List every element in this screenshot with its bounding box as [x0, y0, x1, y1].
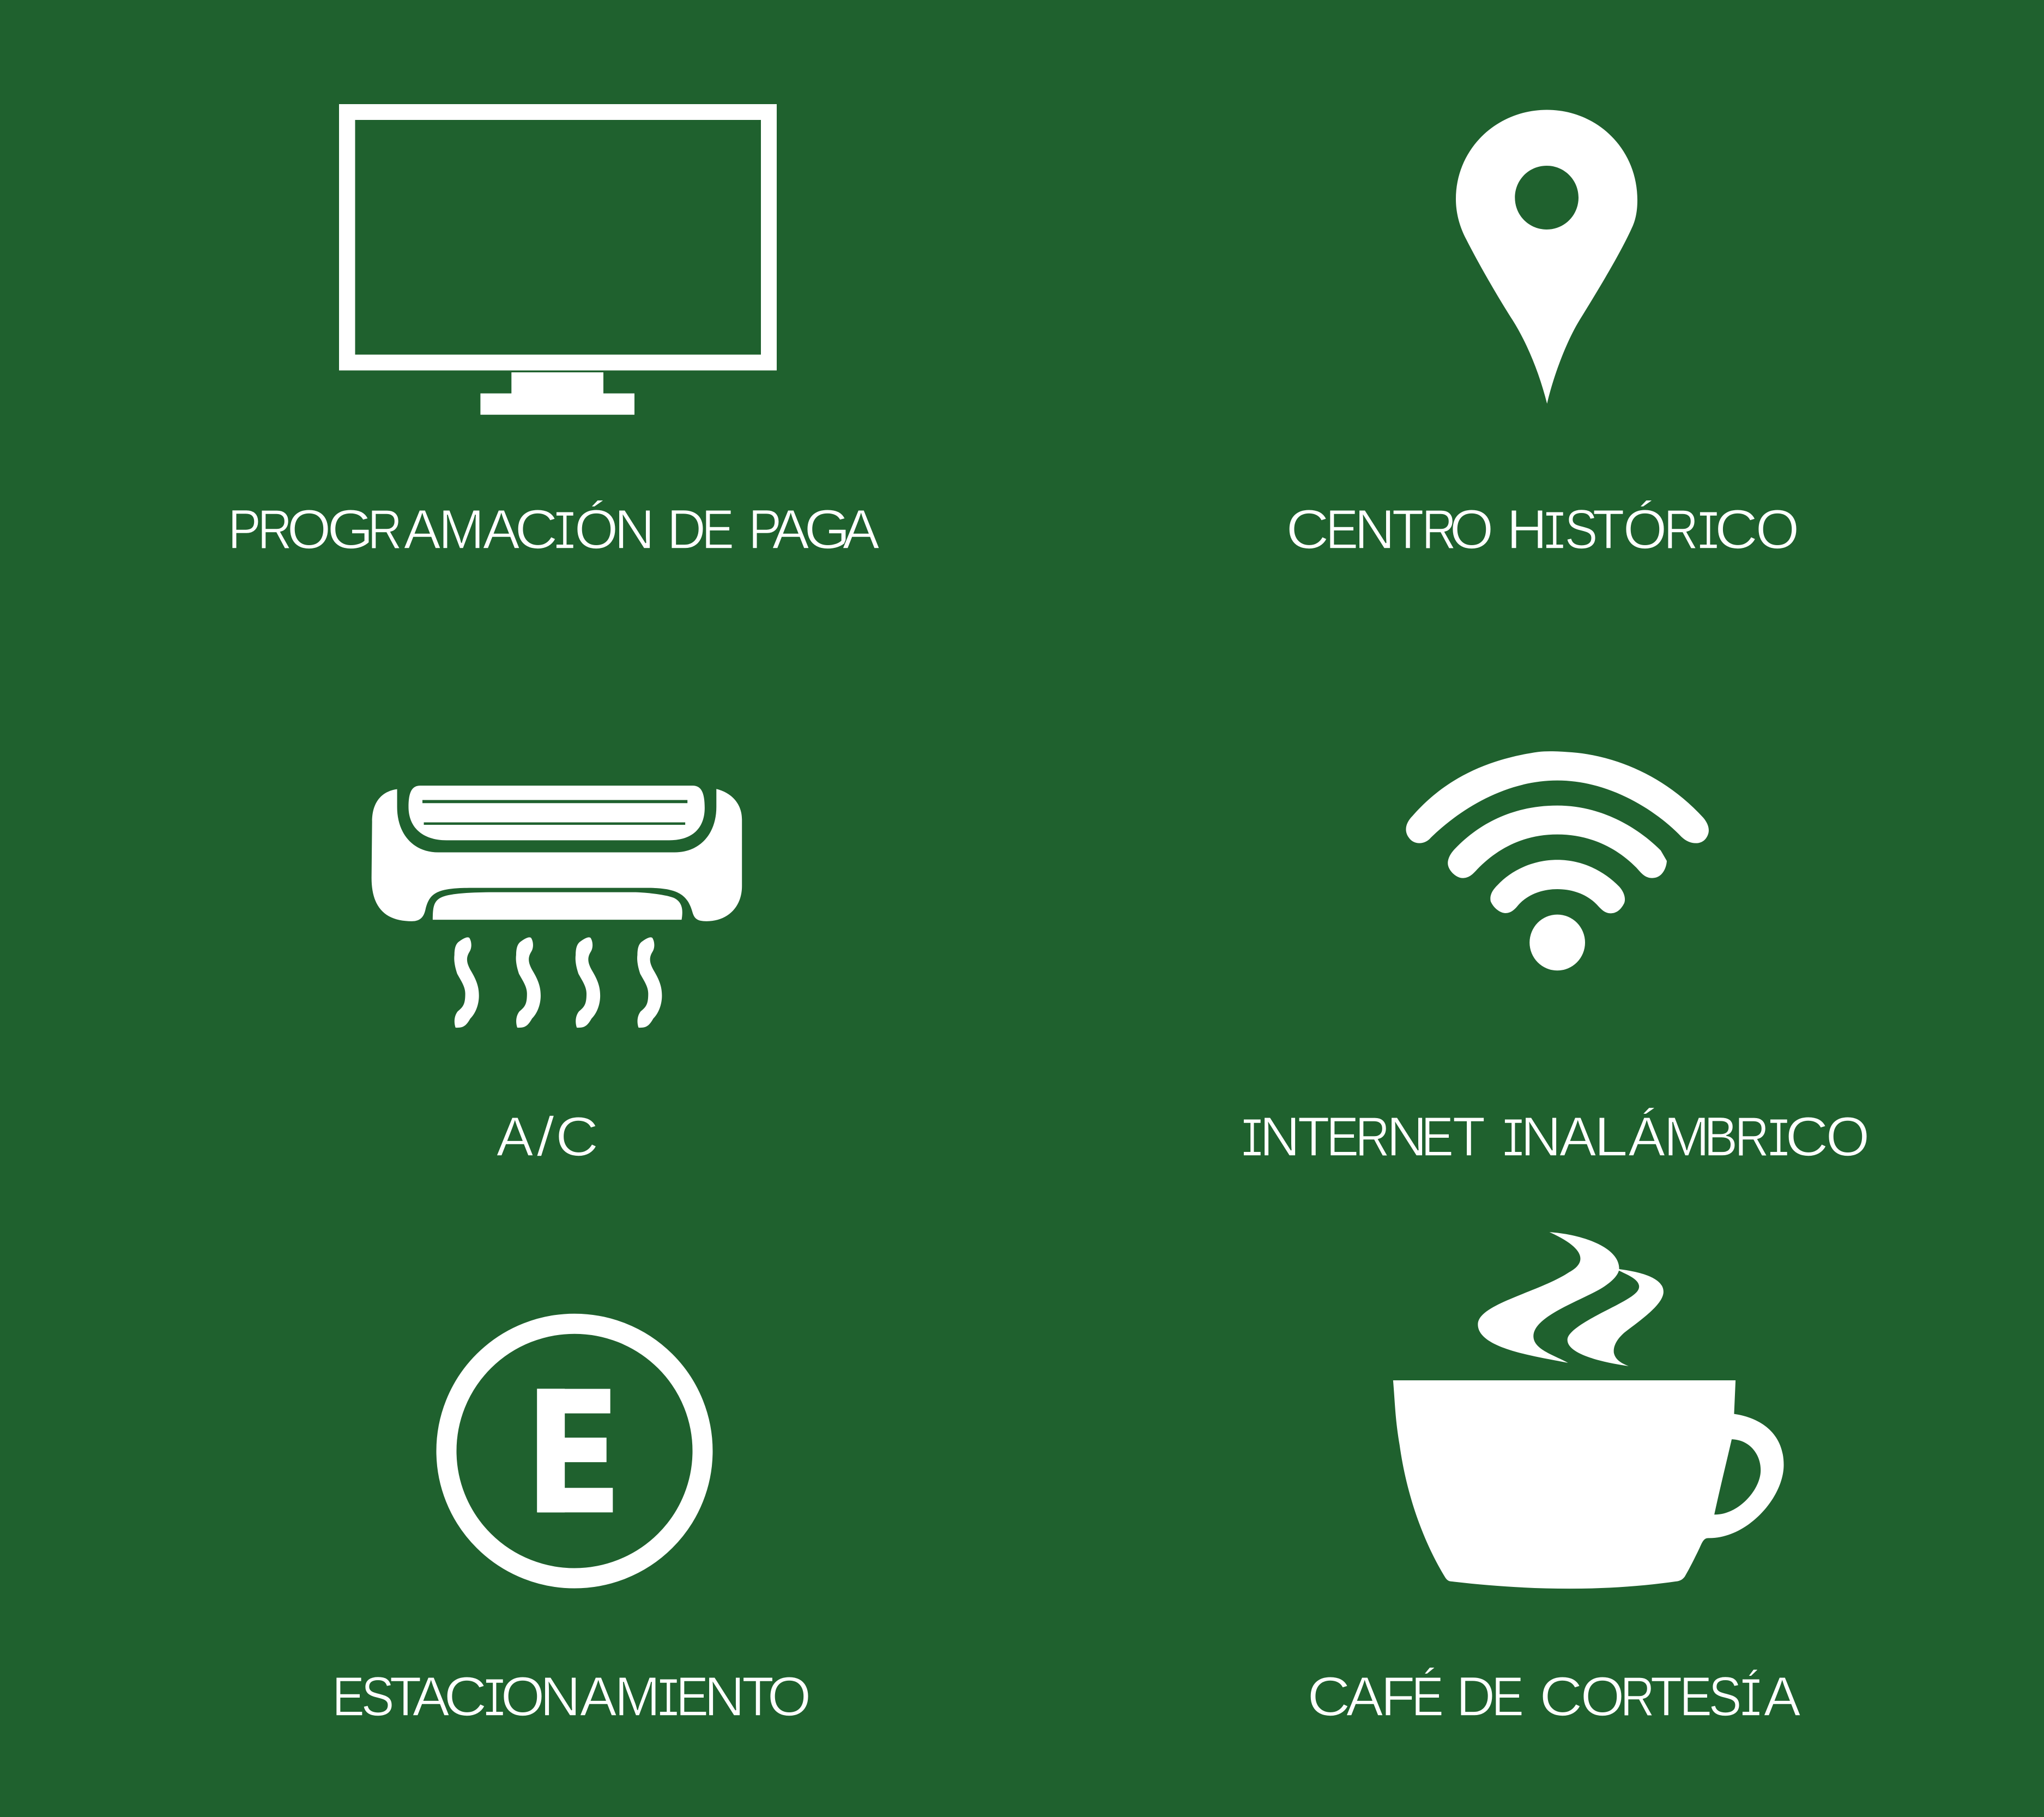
label: programación de paga: P	[228, 498, 261, 560]
label: café de cortesía: C	[1539, 1665, 1583, 1728]
label: internet inalámbrico: B	[1704, 1106, 1738, 1168]
label: estacionamiento: T	[390, 1665, 421, 1728]
label: estacionamiento: N	[704, 1665, 745, 1728]
label: estacionamiento: M	[615, 1665, 661, 1728]
label: estacionamiento: I	[655, 1669, 681, 1733]
label: café de cortesía: A	[1346, 1665, 1383, 1728]
label: programación de paga: A	[772, 498, 809, 560]
label: internet inalámbrico: T	[1453, 1106, 1484, 1168]
label: estacionamiento: T	[742, 1665, 774, 1728]
icon: parking circle	[446, 1324, 703, 1578]
icon: television	[339, 104, 777, 415]
label: estacionamiento: I	[481, 1669, 507, 1733]
label: centro histórico: O	[1450, 498, 1493, 560]
label: programación de paga: A	[483, 498, 520, 560]
label: estacionamiento: C	[444, 1665, 487, 1728]
label: café de cortesía: O	[1581, 1665, 1624, 1728]
label: estacionamiento: A	[413, 1665, 450, 1728]
label: programación de paga: A	[843, 498, 880, 560]
panel: café de cortesía	[1307, 1232, 1801, 1733]
label: programación de paga: D	[667, 498, 706, 560]
label: internet inalámbrico: N	[1521, 1106, 1561, 1168]
label: estacionamiento: E	[676, 1665, 709, 1728]
label: centro histórico: E	[1326, 498, 1358, 560]
label: programación de paga: R	[368, 498, 402, 560]
label: internet inalámbrico: N	[1387, 1106, 1427, 1168]
panel: estacionamiento	[332, 1324, 811, 1733]
label: programación de paga: C	[515, 498, 558, 560]
label: programación de paga: O	[287, 498, 331, 560]
label: a/c: C	[555, 1106, 598, 1168]
label: internet inalámbrico: T	[1298, 1106, 1329, 1168]
label: internet inalámbrico: I	[1765, 1109, 1792, 1173]
label: centro histórico: H	[1507, 498, 1547, 560]
label: a/c: A	[497, 1106, 534, 1168]
label: internet inalámbrico: R	[1356, 1106, 1390, 1168]
label: estacionamiento: E	[332, 1665, 365, 1728]
label: estacionamiento: A	[580, 1665, 617, 1728]
icon: parking circle: E	[531, 1354, 616, 1546]
label: estacionamiento: O	[501, 1665, 545, 1728]
label: café de cortesía: É	[1411, 1665, 1444, 1728]
label: a/c: /	[536, 1106, 555, 1168]
label: café de cortesía: E	[1491, 1665, 1524, 1728]
label: internet inalámbrico: I	[1239, 1109, 1265, 1173]
label: café de cortesía: S	[1709, 1665, 1741, 1728]
label: programación de paga: N	[614, 498, 655, 560]
label: programación de paga: R	[258, 498, 292, 560]
label: internet inalámbrico: Á	[1628, 1106, 1665, 1168]
icon: wifi	[1406, 751, 1709, 970]
label: café de cortesía: T	[1650, 1665, 1682, 1728]
label: programación de paga: P	[748, 498, 782, 560]
label: internet inalámbrico: C	[1785, 1106, 1829, 1168]
label: centro histórico: Ó	[1623, 498, 1667, 560]
label: internet inalámbrico: A	[1559, 1106, 1597, 1168]
label: internet inalámbrico: E	[1421, 1106, 1454, 1168]
label: café de cortesía: E	[1679, 1665, 1712, 1728]
label: estacionamiento: S	[361, 1665, 394, 1728]
label: internet inalámbrico: I	[1500, 1109, 1526, 1173]
panel: programación de paga	[228, 104, 880, 565]
label: programación de paga: Ó	[575, 498, 618, 560]
label: estacionamiento: O	[767, 1665, 811, 1728]
label: café de cortesía: R	[1620, 1665, 1655, 1728]
label: centro histórico: O	[1756, 498, 1799, 560]
panel: a/c	[372, 786, 742, 1168]
label: internet inalámbrico: R	[1735, 1106, 1769, 1168]
label: centro histórico: T	[1593, 498, 1624, 560]
label: centro histórico: C	[1715, 498, 1758, 560]
panel: centro histórico	[1286, 110, 1799, 565]
label: café de cortesía: D	[1456, 1665, 1495, 1728]
label: café de cortesía: A	[1764, 1665, 1801, 1728]
label: programación de paga: I	[552, 502, 578, 565]
label: centro histórico: N	[1354, 498, 1395, 560]
label: programación de paga: G	[327, 498, 374, 560]
label: centro histórico: I	[1541, 502, 1568, 565]
label: internet inalámbrico: M	[1664, 1106, 1709, 1168]
icon: coffee cup with steam	[1393, 1232, 1783, 1589]
label: centro histórico: I	[1695, 502, 1721, 565]
label: café de cortesía: Í	[1738, 1669, 1764, 1733]
label: internet inalámbrico: L	[1594, 1106, 1628, 1168]
label: centro histórico: S	[1565, 498, 1598, 560]
label: programación de paga: G	[804, 498, 850, 560]
label: café de cortesía: C	[1307, 1665, 1351, 1728]
icon: map pin	[1456, 110, 1637, 403]
label: estacionamiento: N	[540, 1665, 580, 1728]
label: centro histórico: R	[1664, 498, 1698, 560]
label: internet inalámbrico: O	[1826, 1106, 1870, 1168]
icon: air conditioner	[372, 786, 742, 1028]
label: centro histórico: R	[1422, 498, 1456, 560]
label: internet inalámbrico: E	[1326, 1106, 1359, 1168]
label: programación de paga: E	[702, 498, 734, 560]
label: centro histórico: T	[1392, 498, 1424, 560]
label: internet inalámbrico: N	[1260, 1106, 1300, 1168]
label: café de cortesía: F	[1381, 1665, 1415, 1728]
label: programación de paga: M	[438, 498, 484, 560]
panel: internet inalámbrico	[1239, 751, 1870, 1173]
label: centro histórico: C	[1286, 498, 1329, 560]
label: programación de paga: A	[404, 498, 441, 560]
